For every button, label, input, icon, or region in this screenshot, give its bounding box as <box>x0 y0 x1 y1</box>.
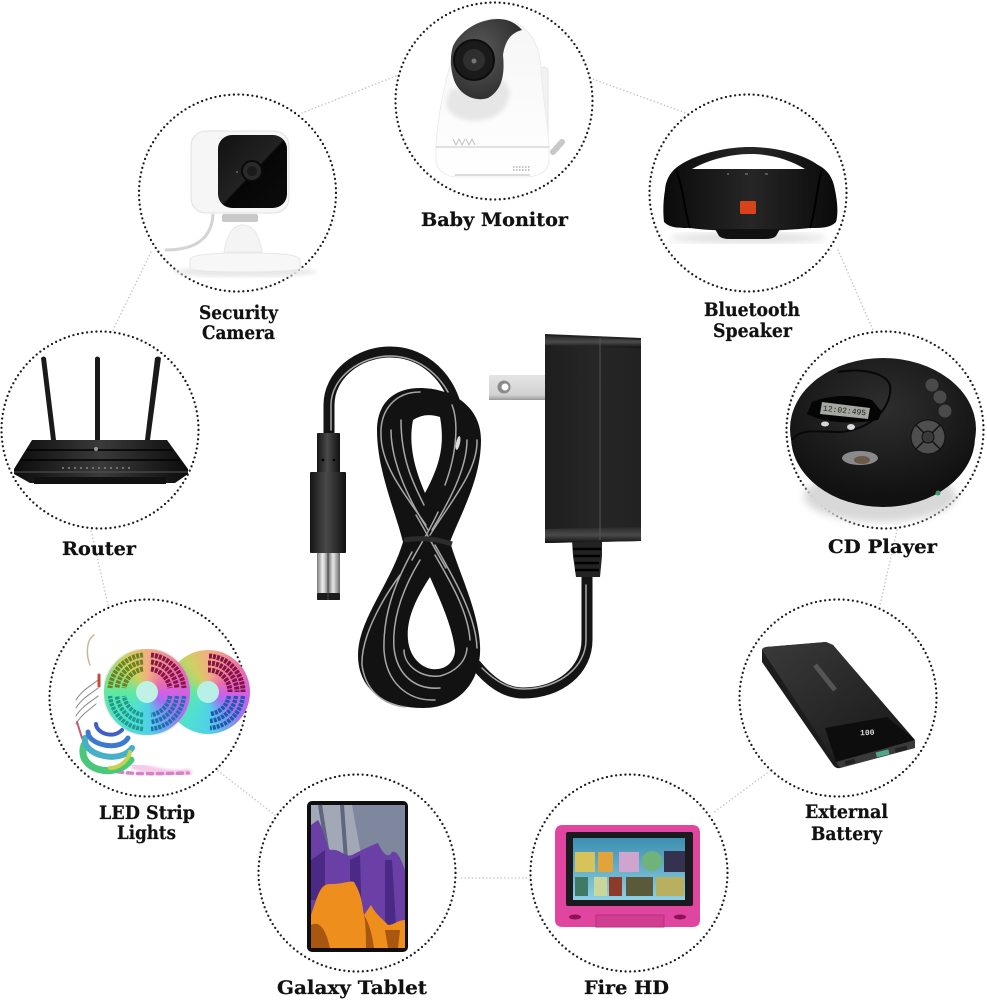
panel: CD player <box>786 332 984 558</box>
label: Bluetooth Speaker: Speaker <box>713 320 793 342</box>
label: Bluetooth Speaker: Bluetooth <box>704 299 800 321</box>
label: Fire HD: Fire HD <box>584 977 669 999</box>
icon: bluetooth speaker <box>663 147 837 243</box>
dotted ring <box>786 332 984 528</box>
label: External Battery <box>805 801 888 845</box>
upper lobe silhouette <box>377 388 481 542</box>
label: Security Camera: Camera <box>202 322 275 344</box>
dotted ring <box>650 94 846 292</box>
icon: CD player: 12:02:495 <box>822 405 867 418</box>
label: LED Strip Lights <box>99 802 195 844</box>
label: External Battery: External <box>805 801 888 823</box>
cable from adapter <box>476 578 587 693</box>
label: Bluetooth Speaker <box>704 299 800 342</box>
label: LED Strip Lights: LED Strip <box>99 802 195 824</box>
DC barrel plug <box>310 433 346 600</box>
label: External Battery: Battery <box>811 823 883 845</box>
cable to DC plug <box>329 352 454 435</box>
label: Baby Monitor: Baby Monitor <box>421 209 569 231</box>
dotted ring <box>50 600 246 796</box>
label: Security Camera <box>199 302 279 344</box>
LED strip coil <box>83 724 188 774</box>
panel: external battery <box>740 600 936 845</box>
lower opening <box>408 577 455 669</box>
label: CD Player: CD Player <box>828 536 938 558</box>
small opening <box>455 436 461 450</box>
icon: power bank: 100 <box>860 729 875 738</box>
dotted connector lines between device circles <box>91 76 897 878</box>
upper opening <box>411 415 442 493</box>
dotted ring <box>2 332 198 528</box>
lower lobe silhouette <box>358 542 480 708</box>
dotted ring <box>530 774 728 972</box>
music notes <box>76 635 99 738</box>
panel: Fire HD <box>530 774 728 999</box>
first reel <box>104 649 190 735</box>
panel: bluetooth speaker <box>650 94 846 342</box>
coiled cable figure eight <box>358 388 481 708</box>
dotted ring <box>258 774 456 972</box>
adapter body <box>545 334 641 543</box>
wall plug prong <box>489 375 546 400</box>
label: Router: Router <box>62 538 137 560</box>
label: LED Strip Lights: Lights <box>117 822 176 844</box>
dotted ring <box>740 600 936 796</box>
icon: CD player <box>790 358 976 522</box>
panel: security camera <box>139 94 336 344</box>
icon: kids tablet <box>555 825 700 927</box>
cable tie <box>404 539 452 544</box>
icon: tablet <box>307 801 408 952</box>
icon: baby monitor camera <box>436 19 562 177</box>
icon: security camera <box>165 131 317 277</box>
dotted ring <box>396 2 592 200</box>
panel: LED strip lights <box>50 600 250 844</box>
panel: baby monitor <box>396 2 592 231</box>
icon: LED reels and strip <box>76 635 250 774</box>
label: Galaxy Tablet: Galaxy Tablet <box>277 977 427 999</box>
panel: router <box>2 332 198 560</box>
icon: power bank <box>762 642 915 768</box>
strand highlights <box>362 392 477 707</box>
icon: router <box>14 356 188 484</box>
dotted ring <box>139 94 336 292</box>
panel: galaxy tablet <box>258 774 456 999</box>
strain relief <box>572 540 602 577</box>
central power adapter with coiled cable <box>310 334 641 708</box>
label: Security Camera: Security <box>199 302 279 324</box>
second reel <box>166 650 250 734</box>
